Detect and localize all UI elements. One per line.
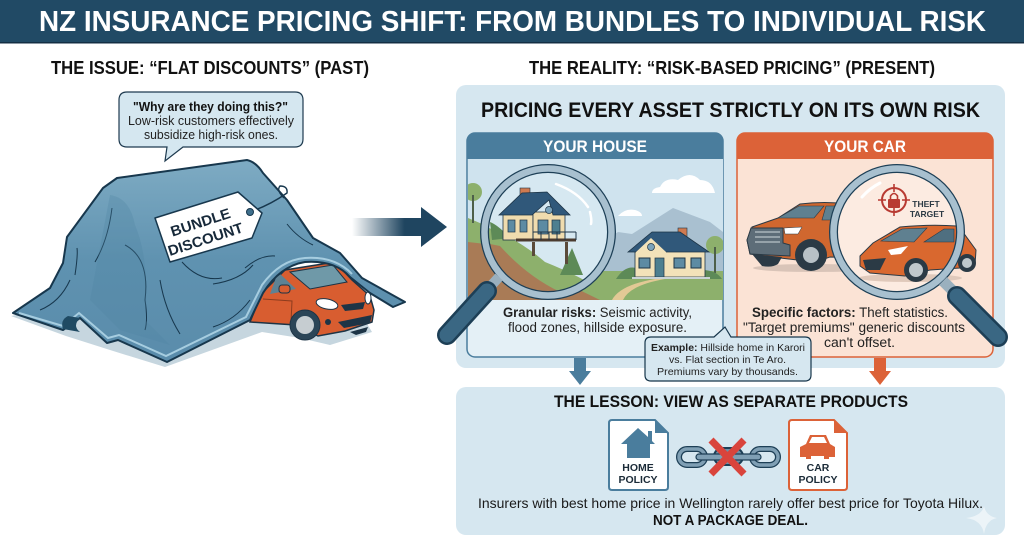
panel: your car [737, 133, 998, 357]
lesson text: NOT A PACKAGE DEAL. [653, 513, 808, 529]
panel: your house: YOUR HOUSE [543, 137, 647, 156]
text: granular risks [503, 305, 692, 335]
icon: home policy document [609, 420, 668, 490]
magnifier: hillside house [447, 168, 615, 335]
panel: the lesson [456, 387, 1005, 535]
text: granular risks: Granular risks: Seismic activity, [503, 305, 692, 320]
title banner: NZ INSURANCE PRICING SHIFT: FROM BUNDLES TO INDIVIDUAL RISK [39, 6, 986, 38]
icon: theft target reticle: THEFT [912, 199, 940, 209]
icon: car policy document [789, 420, 847, 490]
tag: bundle discount: BUNDLE [169, 206, 233, 240]
text: granular risks: flood zones, hillside exposure. [508, 320, 687, 335]
arrow: past to present [352, 207, 447, 247]
illustration: car under blanket [11, 160, 405, 367]
tag: bundle discount [155, 186, 287, 262]
ground shadow [11, 300, 372, 367]
text: specific factors: "Target premiums" generic discounts [743, 320, 965, 335]
callout: example: Example: Hillside home in Karori [651, 342, 805, 354]
panel heading: PRICING EVERY ASSET STRICTLY ON ITS OWN RISK [481, 99, 980, 122]
heading: the issue: THE ISSUE: “FLAT DISCOUNTS” (PAST) [51, 57, 369, 78]
panel: reality [447, 85, 1005, 368]
icon: pickup truck [747, 202, 877, 272]
tag: bundle discount: DISCOUNT [166, 220, 245, 260]
callout: why are they doing this: Low-risk customers effectively [128, 114, 295, 128]
icon: orange car [250, 262, 374, 340]
callout: why are they doing this [119, 92, 303, 161]
blanket [13, 160, 405, 362]
icon: theft target reticle: TARGET [910, 209, 945, 219]
callout: example: vs. Flat section in Te Aro. [669, 354, 786, 366]
icon: car policy document: CAR [807, 462, 830, 474]
lesson text: Insurers with best home price in Wellington rarely offer best price for Toyota Hilux. [478, 495, 983, 511]
magnifier: theft target car [834, 168, 998, 337]
icon: sparkle [966, 506, 997, 534]
icon: theft target reticle [878, 184, 945, 219]
icon: home policy document: POLICY [618, 474, 658, 486]
lesson heading: THE LESSON: VIEW AS SEPARATE PRODUCTS [554, 392, 908, 411]
lesson text [478, 495, 983, 529]
arrow: house to lesson [569, 358, 591, 385]
icon: hatchback [858, 225, 976, 282]
panel: your house [447, 133, 724, 357]
heading: the reality: THE REALITY: “RISK-BASED PRICING” (PRESENT) [529, 57, 935, 78]
callout: example: Premiums vary by thousands. [657, 366, 798, 378]
callout: why are they doing this: subsidize high-risk ones. [144, 128, 278, 142]
callout: example [645, 327, 811, 381]
arrow: car to lesson [869, 358, 891, 385]
icon: car policy document: POLICY [798, 474, 838, 486]
icon: home policy document: HOME [622, 462, 654, 474]
panel: your car: YOUR CAR [824, 137, 906, 156]
text: specific factors: Specific factors: Theft statistics. [752, 305, 948, 320]
house scene [464, 159, 724, 300]
icon: broken chain [679, 440, 778, 474]
text: specific factors [743, 305, 965, 350]
callout: why are they doing this: "Why are they doing this?" [133, 100, 288, 114]
text: specific factors: can't offset. [824, 335, 895, 350]
